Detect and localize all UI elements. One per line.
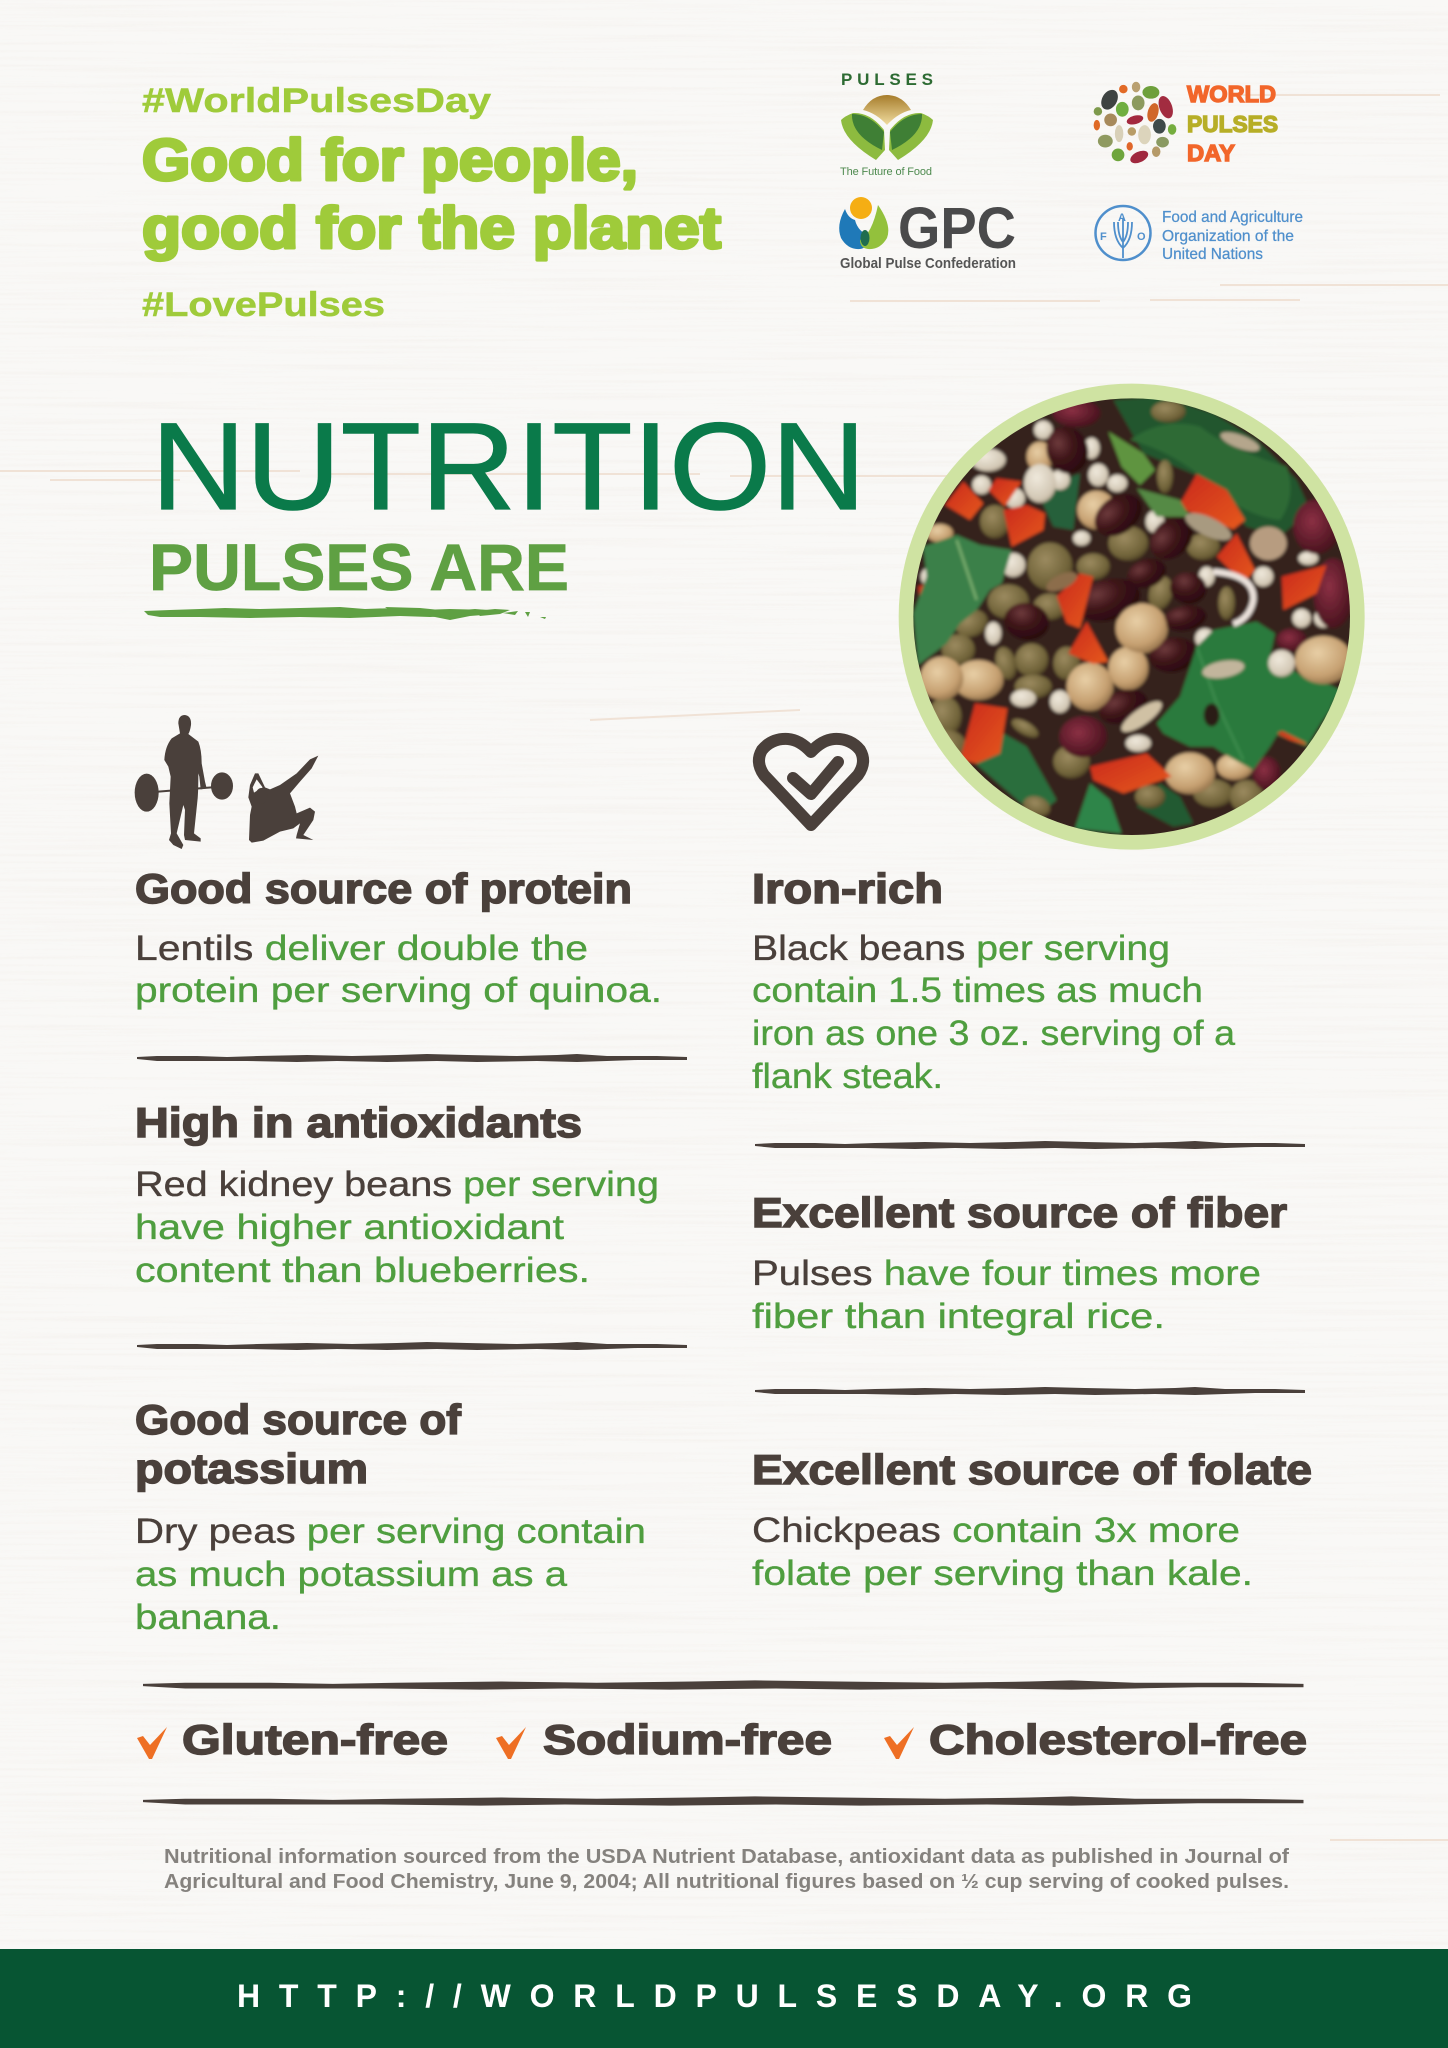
logo: World Pulses Day: WORLD	[1187, 81, 1276, 107]
hashtag: LovePulses: #LovePulses	[142, 286, 385, 324]
icon: check	[496, 1727, 526, 1759]
logo: FAO: O	[1137, 231, 1146, 243]
icon: check	[137, 1727, 167, 1759]
weightlifter	[135, 715, 233, 849]
section: High in antioxidants	[135, 1099, 659, 1290]
section: Excellent source of folate	[752, 1446, 1312, 1593]
header text block	[142, 82, 721, 324]
brush underline	[144, 607, 546, 620]
photo: pulse salad in ring	[899, 384, 1365, 850]
logo: GPC Global Pulse Confederation: Global Pulse Confederation	[840, 255, 1016, 272]
icon: heart with checkmark	[759, 739, 863, 825]
headline	[142, 128, 721, 261]
logo: Pulses The Future of Food	[840, 70, 933, 178]
icon: weightlifter and yoga silhouettes	[135, 715, 318, 849]
divider	[755, 1141, 1305, 1149]
headline: good for the planet	[142, 196, 721, 261]
lentils	[927, 401, 1263, 821]
free-from list	[137, 1716, 1307, 1763]
section: Good source of potassium: as much potassium as a	[135, 1555, 568, 1594]
title: NUTRITION: NUTRITION	[151, 398, 866, 536]
section: Good source of protein: protein per serving of quinoa.	[135, 971, 662, 1010]
divider	[137, 1054, 687, 1062]
section: Good source of potassium	[135, 1396, 646, 1637]
black beans	[1001, 420, 1209, 730]
divider	[143, 1680, 1304, 1690]
logo: World Pulses Day	[1094, 81, 1278, 166]
section: Excellent source of fiber: fiber than integral rice.	[752, 1297, 1165, 1336]
section: Good source of protein	[135, 865, 662, 1010]
section: High in antioxidants: High in antioxidants	[135, 1099, 582, 1146]
logo: Pulses The Future of Food: PULSES	[841, 70, 933, 89]
section: Good source of protein: Good source of protein	[135, 865, 632, 912]
logo: FAO: Organization of the	[1162, 228, 1294, 245]
front leaves	[913, 432, 1337, 833]
section: Excellent source of fiber: Pulses have four times more	[752, 1254, 1261, 1293]
logo: Pulses The Future of Food: The Future of Food	[840, 166, 932, 178]
section: Good source of potassium: Good source of	[135, 1396, 462, 1443]
chickpeas over beans	[1100, 600, 1170, 709]
logo: World Pulses Day: DAY	[1187, 140, 1235, 166]
back leaves	[973, 397, 1340, 827]
footnote	[164, 1846, 1289, 1893]
logo: GPC Global Pulse Confederation: GPC	[898, 196, 1016, 261]
chickpeas	[920, 442, 1253, 794]
section: Good source of protein: Lentils deliver double the	[135, 929, 588, 968]
logo: FAO: A	[1118, 212, 1126, 224]
subtitle: PULSES ARE: PULSES ARE	[149, 530, 569, 604]
yoga figure	[248, 756, 318, 843]
section: Good source of potassium: banana.	[135, 1598, 281, 1637]
logo: FAO	[1096, 206, 1303, 263]
red peppers	[918, 474, 1327, 793]
cranberries	[1053, 399, 1353, 790]
label: Sodium-free: Sodium-free	[543, 1716, 832, 1763]
section: Iron-rich: contain 1.5 times as much	[752, 971, 1203, 1010]
headline: Good for people,	[142, 128, 638, 193]
section: Excellent source of fiber: Excellent source of fiber	[752, 1189, 1287, 1236]
footnote: Agricultural and Food Chemistry, June 9, 2004; All nutritional figures based on ½ cup serving of cooked pulses.	[164, 1871, 1289, 1893]
section: Iron-rich: Iron-rich	[752, 865, 943, 912]
section: Excellent source of folate: Excellent source of folate	[752, 1446, 1312, 1493]
chickpea, barley, seeds and onion on top	[1043, 428, 1352, 737]
section: Iron-rich	[752, 865, 1236, 1096]
footer band with URL	[0, 1949, 1448, 2048]
section: Iron-rich: flank steak.	[752, 1057, 943, 1096]
section: High in antioxidants: Red kidney beans per serving	[135, 1165, 659, 1204]
icon: check	[884, 1727, 914, 1759]
logo: FAO: F	[1100, 231, 1107, 243]
label: Gluten-free: Gluten-free	[182, 1716, 448, 1763]
barley	[921, 421, 1333, 752]
logo: World Pulses Day: PULSES	[1187, 111, 1278, 137]
section: Excellent source of folate: Chickpeas contain 3x more	[752, 1511, 1240, 1550]
divider	[143, 1796, 1304, 1806]
logo: GPC Global Pulse Confederation	[839, 196, 1016, 272]
section: High in antioxidants: content than blueberries.	[135, 1251, 590, 1290]
section: Iron-rich: iron as one 3 oz. serving of a	[752, 1014, 1236, 1053]
divider	[137, 1342, 687, 1350]
logo: FAO: United Nations	[1162, 246, 1263, 263]
label: Cholesterol-free: Cholesterol-free	[929, 1716, 1307, 1763]
section: Good source of potassium: potassium	[135, 1445, 368, 1492]
section: Good source of potassium: Dry peas per serving contain	[135, 1512, 646, 1551]
section: Iron-rich: Black beans per serving	[752, 929, 1170, 968]
section: Excellent source of folate: folate per serving than kale.	[752, 1554, 1253, 1593]
section: Excellent source of fiber	[752, 1189, 1287, 1336]
footer band with URL: HTTP://WORLDPULSESDAY.ORG	[237, 1978, 1192, 2014]
logo: FAO: Food and Agriculture	[1162, 209, 1303, 226]
hashtag: WorldPulsesDay: #WorldPulsesDay	[142, 82, 491, 120]
section: High in antioxidants: have higher antioxidant	[135, 1208, 564, 1247]
divider	[755, 1387, 1305, 1395]
footnote: Nutritional information sourced from the USDA Nutrient Database, antioxidant data as published in Journal of	[164, 1846, 1289, 1868]
